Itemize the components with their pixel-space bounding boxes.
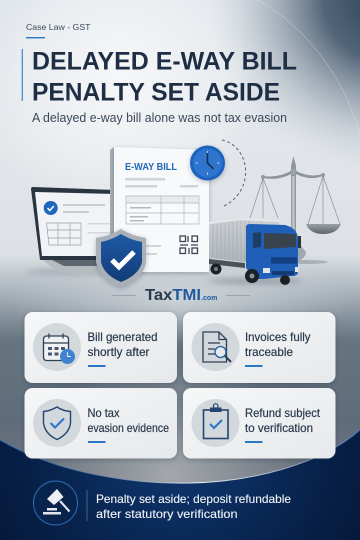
icon: document with magnifier [203, 332, 231, 362]
title [22, 48, 297, 106]
divider and verdict text: after statutory verification [96, 507, 238, 521]
icon: truck [207, 218, 303, 285]
card: no tax evasion [24, 388, 177, 458]
eyebrow label [26, 22, 91, 38]
document: e-way bill [110, 147, 209, 272]
eyebrow label: Case Law - GST [26, 22, 91, 32]
icon: shield check [44, 407, 70, 440]
card: invoices: traceable [245, 346, 293, 359]
card: bill generated: Bill generated [88, 331, 158, 344]
illustration [25, 140, 341, 287]
icon: qr code [180, 236, 198, 254]
icon: calendar [44, 334, 75, 364]
icon: clock [190, 140, 246, 206]
card: refund: Refund subject [245, 407, 321, 420]
laptop [25, 187, 115, 275]
card: invoices: Invoices fully [245, 331, 311, 344]
icon: security shield [96, 229, 146, 287]
footer band [0, 430, 360, 540]
title: DELAYED E-WAY BILL [32, 48, 297, 76]
title: PENALTY SET ASIDE [32, 80, 280, 106]
icon: clipboard check [204, 404, 228, 438]
document: e-way bill: E-WAY BILL [125, 161, 178, 173]
card: refund [183, 388, 336, 458]
card: no tax evasion: evasion evidence [88, 422, 169, 435]
card: refund: to verification [245, 422, 313, 435]
icon: gavel [34, 481, 78, 525]
logo: TaxTMI.com: TaxTMI [145, 287, 201, 304]
subtitle: A delayed e-way bill alone was not tax evasion [32, 111, 287, 125]
icon: scales of justice [250, 156, 341, 264]
divider and verdict text [86, 490, 291, 521]
card: invoices [183, 312, 336, 383]
logo: TaxTMI.com [112, 287, 250, 304]
card: no tax evasion: No tax [88, 407, 120, 420]
card: bill generated: shortly after [88, 346, 150, 359]
divider and verdict text: Penalty set aside; deposit refundable [96, 492, 291, 506]
card: bill generated [24, 312, 177, 383]
logo: TaxTMI.com: .com [201, 295, 217, 302]
